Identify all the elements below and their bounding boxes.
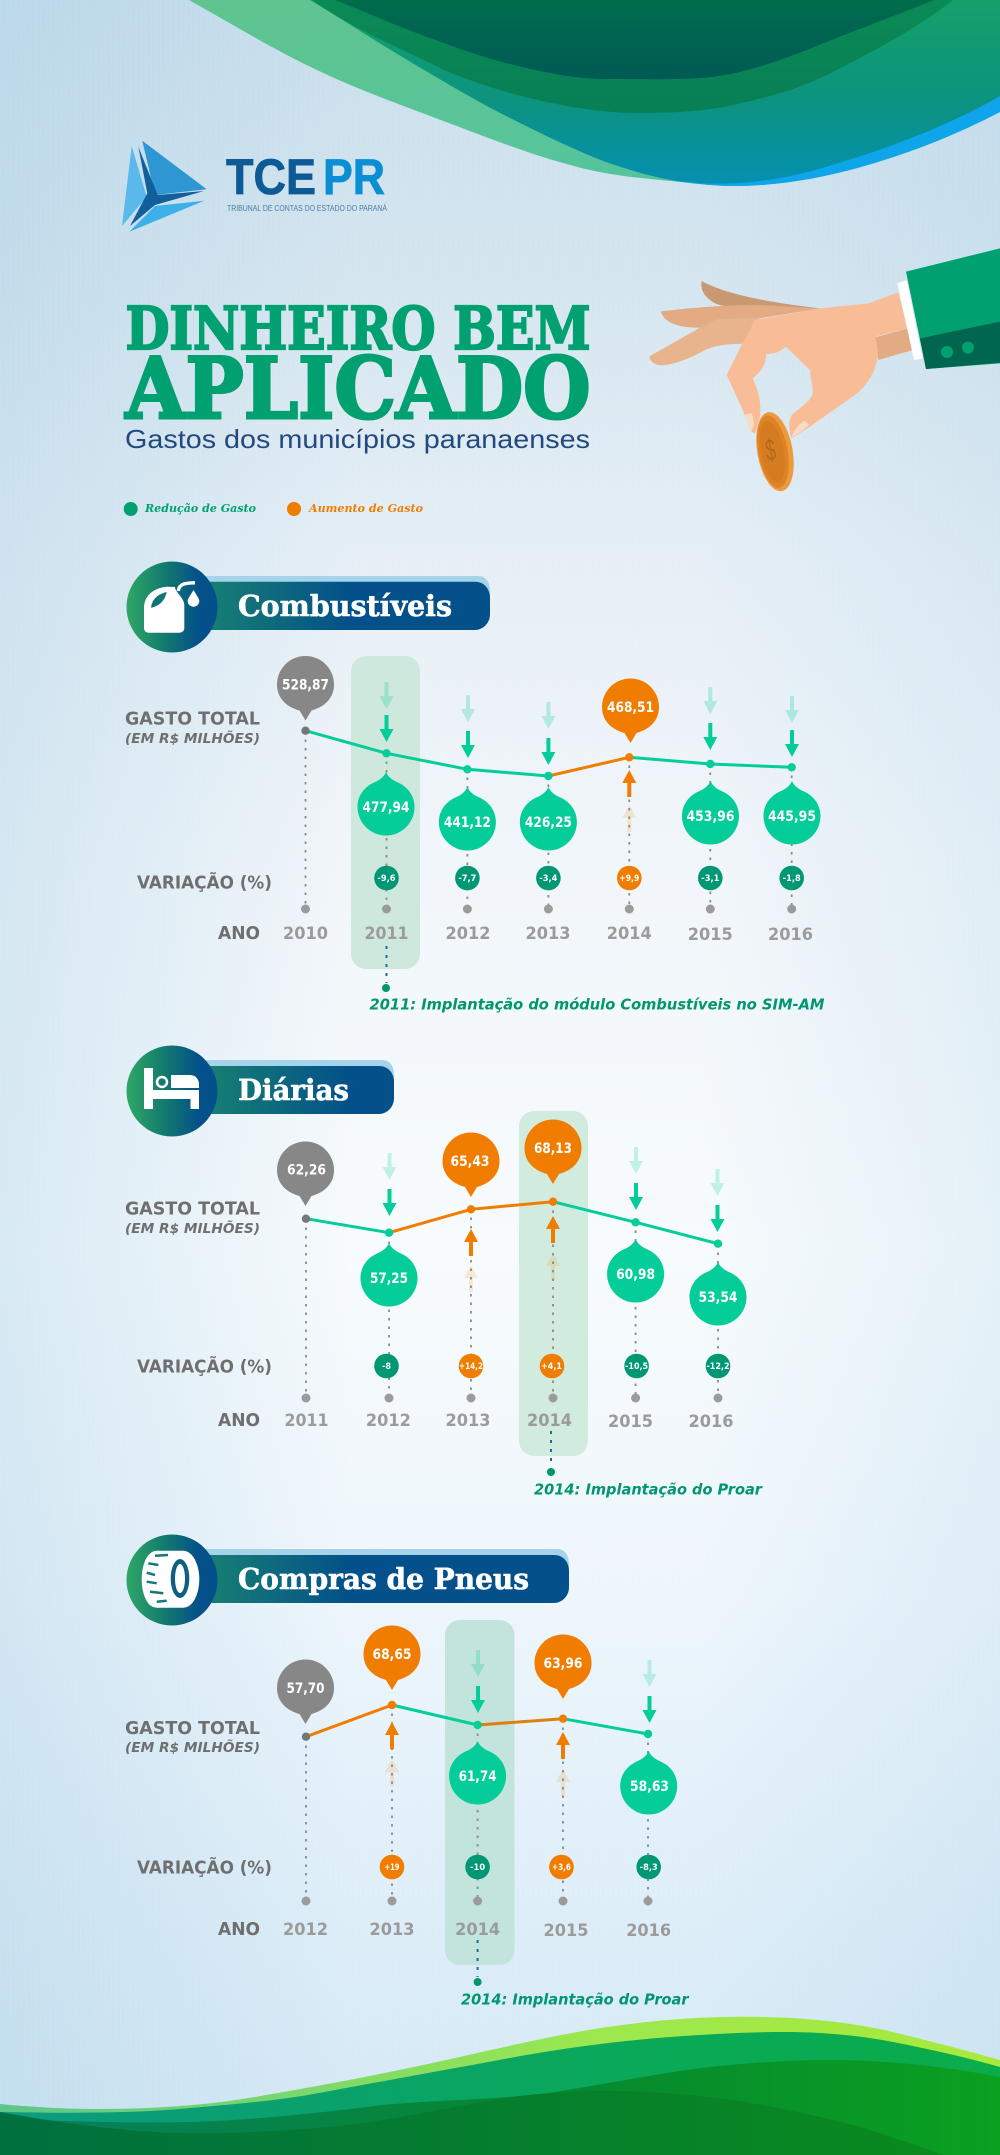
legend: aumento: Aumento de Gasto — [308, 501, 423, 515]
year axis: 2011 — [364, 924, 408, 944]
dotted guides — [306, 1202, 718, 1398]
axis labels: GASTO TOTAL — [125, 1198, 260, 1220]
value balloons: 68,13 — [534, 1141, 572, 1157]
line chart — [302, 1198, 722, 1248]
arrows — [382, 1147, 724, 1292]
panel: combustiveis — [125, 562, 825, 1014]
dotted guides — [306, 731, 792, 909]
variation badges: +9,9 — [619, 874, 639, 884]
variation badges: -9,6 — [378, 874, 396, 884]
callout: 2014 note: 2014: Implantação do Proar — [461, 1990, 690, 2008]
variation badges — [380, 1855, 661, 1879]
year axis: 2015 — [608, 1412, 653, 1432]
value balloons — [277, 1120, 746, 1326]
value balloons: 62,26 — [287, 1162, 326, 1178]
value balloons — [277, 656, 820, 850]
legend — [124, 501, 423, 516]
variation badges: -10,5 — [625, 1362, 648, 1372]
year axis: 2010 — [283, 924, 328, 944]
logo: TCE PR — [122, 141, 388, 232]
value balloons: 58,63 — [630, 1779, 669, 1795]
variation badges: -8,3 — [640, 1863, 658, 1873]
variation badges: +19 — [384, 1863, 400, 1873]
variation badges: -10 — [470, 1863, 485, 1873]
value balloons: 528,87 — [282, 678, 329, 694]
logo wordmark: TRIBUNAL DE CONTAS DO ESTADO DO PARANÁ — [227, 204, 388, 213]
axis labels: ANO — [218, 1410, 260, 1431]
legend: reducao: Redução de Gasto — [144, 501, 256, 515]
axis labels: (EM R$ MILHÕES) — [125, 1740, 260, 1756]
title: DINHEIRO BEM — [126, 294, 590, 363]
year axis: 2016 — [768, 925, 813, 945]
year axis: 2013 — [526, 924, 570, 944]
axis labels: (EM R$ MILHÕES) — [125, 731, 260, 747]
panel: diarias — [125, 1046, 764, 1498]
variation badges: -8 — [382, 1362, 391, 1372]
year axis — [283, 904, 813, 945]
callout: 2011 note — [370, 946, 825, 1014]
year axis: 2016 — [688, 1412, 734, 1432]
variation badges: +4,1 — [541, 1362, 562, 1372]
variation badges: -1,8 — [783, 874, 801, 884]
highlight: 2011 — [351, 656, 420, 969]
arrows — [380, 682, 799, 832]
variation badges: -3,4 — [539, 874, 557, 884]
value balloons: 477,94 — [362, 800, 410, 816]
title: APLICADO — [125, 339, 591, 438]
value balloons: 61,74 — [459, 1769, 497, 1785]
year axis: 2012 — [366, 1411, 411, 1431]
axis labels: VARIAÇÃO (%) — [137, 870, 272, 894]
icon: bed — [144, 1068, 199, 1109]
heading: diarias — [126, 1046, 394, 1136]
callout: 2014 note: 2014: Implantação do Proar — [534, 1480, 764, 1498]
value balloons — [277, 1626, 677, 1814]
variation badges — [374, 866, 804, 890]
value balloons: 57,25 — [370, 1271, 408, 1287]
year axis: 2015 — [688, 925, 733, 945]
title — [125, 294, 591, 454]
panel: compras de pneus — [125, 1534, 690, 2008]
variation badges: -7,7 — [458, 874, 476, 884]
value balloons: 426,25 — [525, 815, 572, 831]
axis labels: VARIAÇÃO (%) — [137, 1856, 272, 1878]
icon: jerrycan — [144, 583, 199, 633]
arrows — [385, 1650, 656, 1796]
year axis: 2012 — [446, 924, 490, 944]
year axis: 2011 — [284, 1411, 328, 1431]
top wave decoration — [189, 0, 1000, 186]
heading: combustiveis — [126, 562, 490, 652]
dotted guides — [306, 1705, 648, 1901]
value balloons: 468,51 — [607, 700, 654, 716]
year axis: 2014 — [607, 924, 652, 944]
icon: hand holding coin — [649, 248, 1000, 494]
year axis: 2013 — [446, 1411, 490, 1431]
value balloons: 441,12 — [444, 815, 491, 831]
callout: 2014 note — [461, 1940, 690, 2008]
title: Gastos dos municípios paranaenses — [125, 424, 590, 454]
icon: tire — [142, 1551, 199, 1608]
icon: hand holding coin: $ — [764, 434, 778, 468]
callout: 2014 note — [534, 1431, 764, 1498]
axis labels — [125, 708, 272, 944]
value balloons: 57,70 — [286, 1681, 325, 1697]
bottom wave decoration — [0, 2017, 1000, 2155]
variation badges: +3,6 — [552, 1863, 571, 1873]
axis labels — [125, 1198, 272, 1431]
axis labels: VARIAÇÃO (%) — [137, 1354, 272, 1378]
axis labels: ANO — [218, 1919, 260, 1940]
axis labels: (EM R$ MILHÕES) — [125, 1221, 260, 1237]
highlight: 2014 — [445, 1620, 514, 1965]
value balloons: 68,65 — [372, 1647, 412, 1663]
logo wordmark: TCE — [226, 149, 316, 205]
value balloons: 453,96 — [686, 809, 734, 825]
callout: 2011 note: 2011: Implantação do módulo Combustíveis no SIM-AM — [370, 996, 825, 1014]
year axis: 2015 — [544, 1921, 588, 1941]
heading: compras de pneus: Compras de Pneus — [238, 1562, 529, 1596]
variation badges — [374, 1354, 730, 1378]
logo wordmark — [226, 149, 388, 213]
heading: diarias: Diárias — [238, 1073, 349, 1107]
value balloons: 53,54 — [698, 1290, 738, 1306]
logo wordmark: PR — [323, 149, 385, 205]
heading: combustiveis: Combustíveis — [238, 589, 452, 623]
year axis: 2013 — [370, 1920, 414, 1940]
highlight: 2014 — [519, 1111, 588, 1456]
heading: compras de pneus — [126, 1534, 569, 1626]
axis labels: GASTO TOTAL — [125, 708, 260, 730]
year axis — [284, 1394, 734, 1432]
line chart — [302, 1701, 652, 1741]
variation badges: +14,2 — [459, 1362, 483, 1372]
line chart — [301, 726, 796, 780]
axis labels — [125, 1718, 272, 1940]
axis labels: ANO — [218, 923, 260, 944]
value balloons: 445,95 — [768, 809, 816, 825]
value balloons: 60,98 — [616, 1267, 655, 1283]
variation badges: -12,2 — [706, 1362, 730, 1372]
logo triangle mark — [122, 141, 207, 232]
year axis: 2014 — [455, 1920, 500, 1940]
variation badges: -3,1 — [701, 874, 719, 884]
year axis — [283, 1896, 671, 1941]
year axis: 2014 — [527, 1411, 572, 1431]
value balloons: 63,96 — [544, 1656, 582, 1672]
value balloons: 65,43 — [450, 1154, 490, 1170]
axis labels: GASTO TOTAL — [125, 1718, 260, 1739]
year axis: 2012 — [283, 1920, 328, 1940]
year axis: 2016 — [626, 1921, 671, 1941]
